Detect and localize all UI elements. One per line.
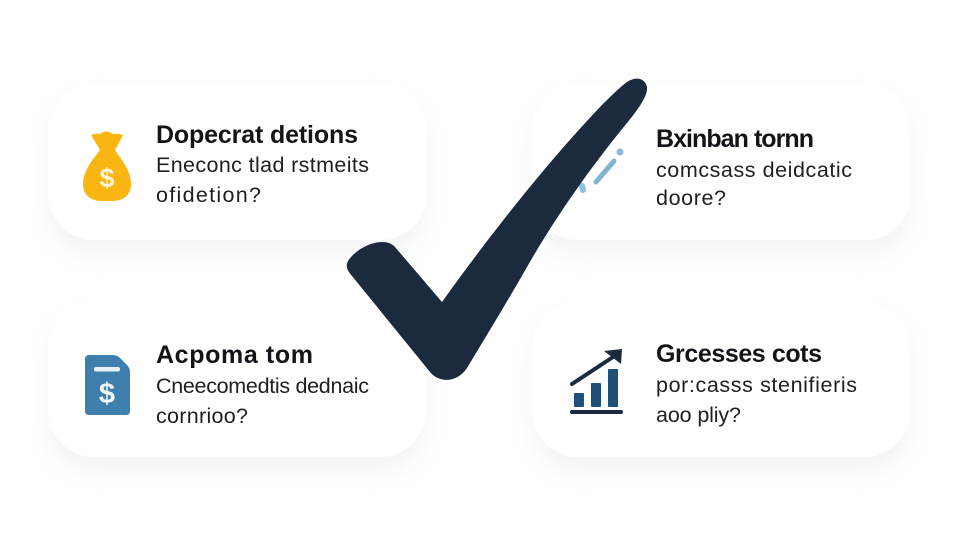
text: bottom left body: Cneecomedtis dednaic: [156, 374, 369, 398]
text: bottom right body: por:casss stenifieris: [656, 373, 857, 397]
text: top right body: comcsass deidcatic: [656, 158, 852, 182]
text: top right body: [656, 158, 852, 210]
text: top left body: ofidetion?: [156, 183, 261, 207]
panel: top left card: [48, 84, 427, 240]
heading: bottom left: Acpoma tom: [156, 341, 313, 369]
text: bottom right body: aoo pliy?: [656, 403, 741, 427]
text: top right body: doore?: [656, 186, 726, 210]
panel: top right card: [532, 84, 911, 240]
text: bottom left body: cornrioo?: [156, 404, 248, 428]
text: bottom left body: [156, 374, 369, 428]
panel: bottom right card: [532, 302, 910, 457]
icon: money bag: $: [99, 163, 115, 193]
icon: dollar document: [85, 355, 130, 415]
icon: growth chart: [570, 349, 623, 414]
heading: top right: Bxinban tornn: [656, 125, 814, 153]
text: bottom right body: [656, 373, 857, 427]
icon: blue accent dashes: [582, 148, 624, 190]
icon: large check mark: [347, 79, 647, 380]
icon: dollar document: $: [99, 378, 115, 410]
icon: money bag: [83, 132, 131, 201]
text: top left body: Eneconc tlad rstmeits: [156, 153, 369, 177]
panel: bottom left card: [48, 302, 426, 457]
text: top left body: [156, 153, 369, 207]
heading: bottom right: Grcesses cots: [656, 340, 822, 368]
heading: top left: Dopecrat detions: [156, 121, 358, 149]
